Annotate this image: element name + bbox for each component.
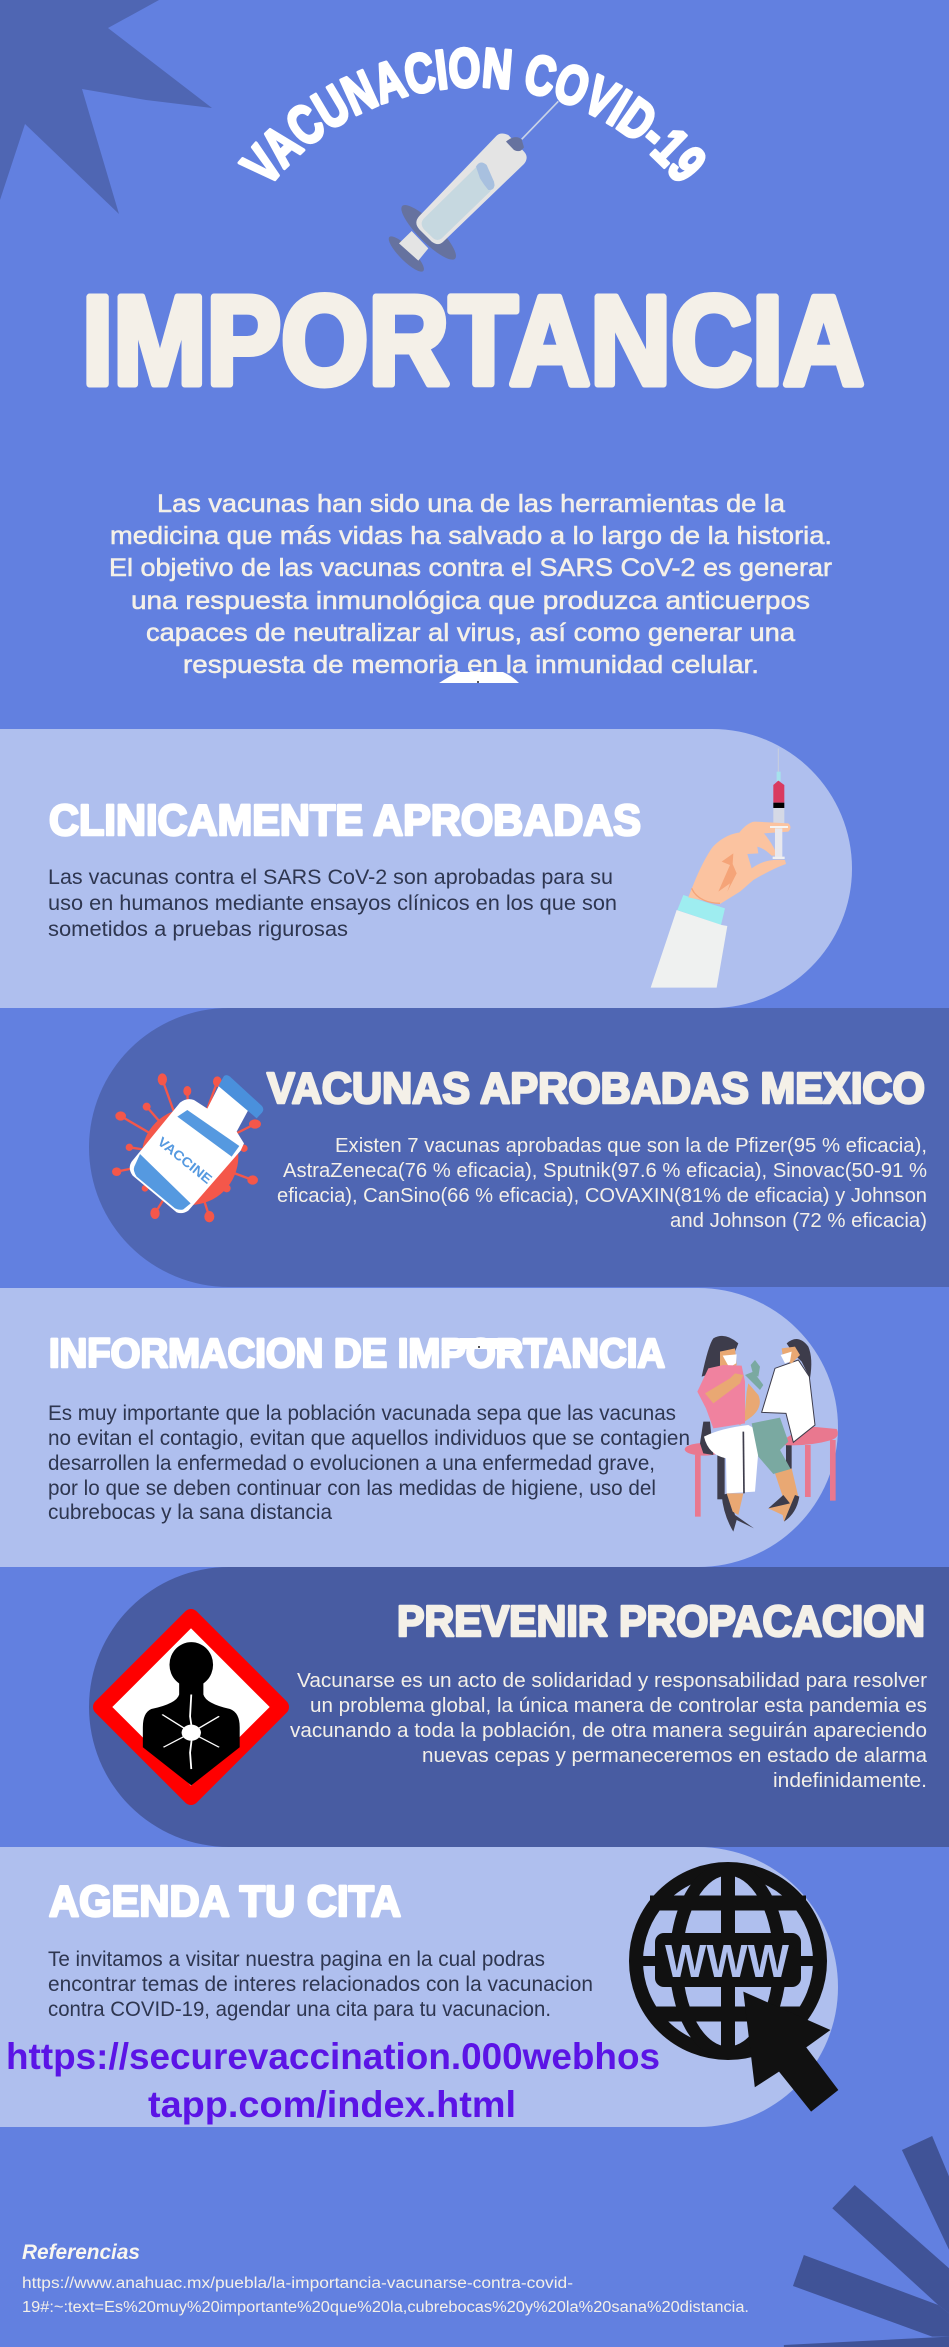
intro text block: una respuesta inmunológica que produzca anticuerpos (131, 587, 810, 615)
heading: INFORMACION DE IMPORTANCIA (49, 1330, 665, 1376)
body text (48, 866, 617, 941)
heading: VACUNAS APROBADAS MEXICO (267, 1064, 925, 1113)
icon: health hazard diamond (101, 1617, 281, 1797)
body text: vacunando a toda la población, de otra manera seguirán apareciendo (290, 1719, 927, 1742)
icon: hand holding syringe (651, 748, 790, 988)
heading: AGENDA TU CITA (49, 1877, 401, 1926)
intro text block: El objetivo de las vacunas contra el SARS CoV-2 es generar (109, 554, 832, 582)
body text: Es muy importante que la población vacunada sepa que las vacunas (48, 1402, 676, 1425)
body text: desarrollen la enfermedad o evolucionen a una enfermedad grave, (48, 1452, 655, 1475)
body text (48, 1948, 593, 2021)
intro text block: Las vacunas han sido una de las herramientas de la (157, 490, 785, 518)
body text: Existen 7 vacunas aprobadas que son la de Pfizer(95 % eficacia), (335, 1134, 927, 1157)
references url: https://www.anahuac.mx/puebla/la-importancia-vacunarse-contra-covid- (22, 2275, 573, 2292)
references (22, 2241, 749, 2316)
body text (277, 1134, 927, 1232)
references heading: Referencias (22, 2241, 140, 2264)
heading: CLINICAMENTE APROBADAS (49, 796, 641, 845)
intro text block (109, 490, 832, 679)
body text: cubrebocas y la sana distancia (48, 1501, 332, 1524)
icon: vaccine bottle with virus: VACCINE (155, 1134, 215, 1187)
body text (48, 1402, 690, 1524)
decorative star top-left (0, 0, 212, 214)
body text: uso en humanos mediante ensayos clínicos en los que son (48, 892, 617, 915)
panel: vacunas aprobadas mexico (89, 1008, 949, 1287)
link text (6, 2036, 660, 2125)
link text: https://securevaccination.000webhos (6, 2036, 660, 2077)
body text: Te invitamos a visitar nuestra pagina en la cual podras (48, 1948, 545, 1971)
stray white shape over heading (441, 1338, 519, 1349)
intro text block: respuesta de memoria en la inmunidad celular. (183, 651, 759, 679)
title: curved heading: VACUNACION COVID-19 (237, 46, 706, 182)
stray white shape under intro (439, 672, 519, 683)
body text: Las vacunas contra el SARS CoV-2 son aprobadas para su (48, 866, 613, 889)
link text: tapp.com/index.html (148, 2084, 516, 2125)
icon: www globe with cursor (636, 1869, 838, 2112)
body text: encontrar temas de interes relacionados con la vacunacion (48, 1973, 593, 1996)
icon: www globe with cursor: WWW (665, 1935, 790, 1987)
body text: contra COVID-19, agendar una cita para tu vacunacion. (48, 1998, 551, 2021)
references url: 19#:~:text=Es%20muy%20importante%20que%20la,cubrebocas%20y%20la%20sana%20distancia. (22, 2299, 749, 2316)
intro text block: medicina que más vidas ha salvado a lo largo de la historia. (110, 522, 832, 550)
decorative rays bottom-right (784, 2136, 949, 2347)
body text: AstraZeneca(76 % eficacia), Sputnik(97.6 % eficacia), Sinovac(50-91 % (283, 1159, 927, 1182)
body text: eficacia), CanSino(66 % eficacia), COVAXIN(81% de eficacia) y Johnson (277, 1184, 927, 1207)
body text: nuevas cepas y permaneceremos en estado de alarma (422, 1744, 928, 1767)
heading: PREVENIR PROPACACION (397, 1597, 925, 1646)
icon: nurse vaccinating patient (685, 1336, 838, 1532)
panel: clinicamente aprobadas (0, 729, 852, 1008)
body text: por lo que se deben continuar con las medidas de higiene, uso del (48, 1477, 656, 1500)
title: IMPORTANCIA: IMPORTANCIA (82, 270, 864, 411)
body text: un problema global, la única manera de controlar esta pandemia es (310, 1694, 927, 1717)
panel: agenda tu cita (0, 1847, 838, 2127)
body text: Vacunarse es un acto de solidaridad y responsabilidad para resolver (297, 1669, 927, 1692)
panel: informacion de importancia (0, 1288, 838, 1567)
icon: syringe (385, 101, 558, 276)
body text: no evitan el contagio, evitan que aquellos individuos que se contagien (48, 1427, 690, 1450)
references url (22, 2275, 749, 2316)
panel: prevenir propagacion (89, 1567, 949, 1847)
icon: vaccine bottle with virus (112, 1073, 263, 1222)
intro text block: capaces de neutralizar al virus, así como generar una (146, 619, 795, 647)
body text: indefinidamente. (773, 1769, 927, 1792)
body text: and Johnson (72 % eficacia) (670, 1209, 927, 1232)
body text (290, 1669, 928, 1792)
body text: sometidos a pruebas rigurosas (48, 918, 348, 941)
